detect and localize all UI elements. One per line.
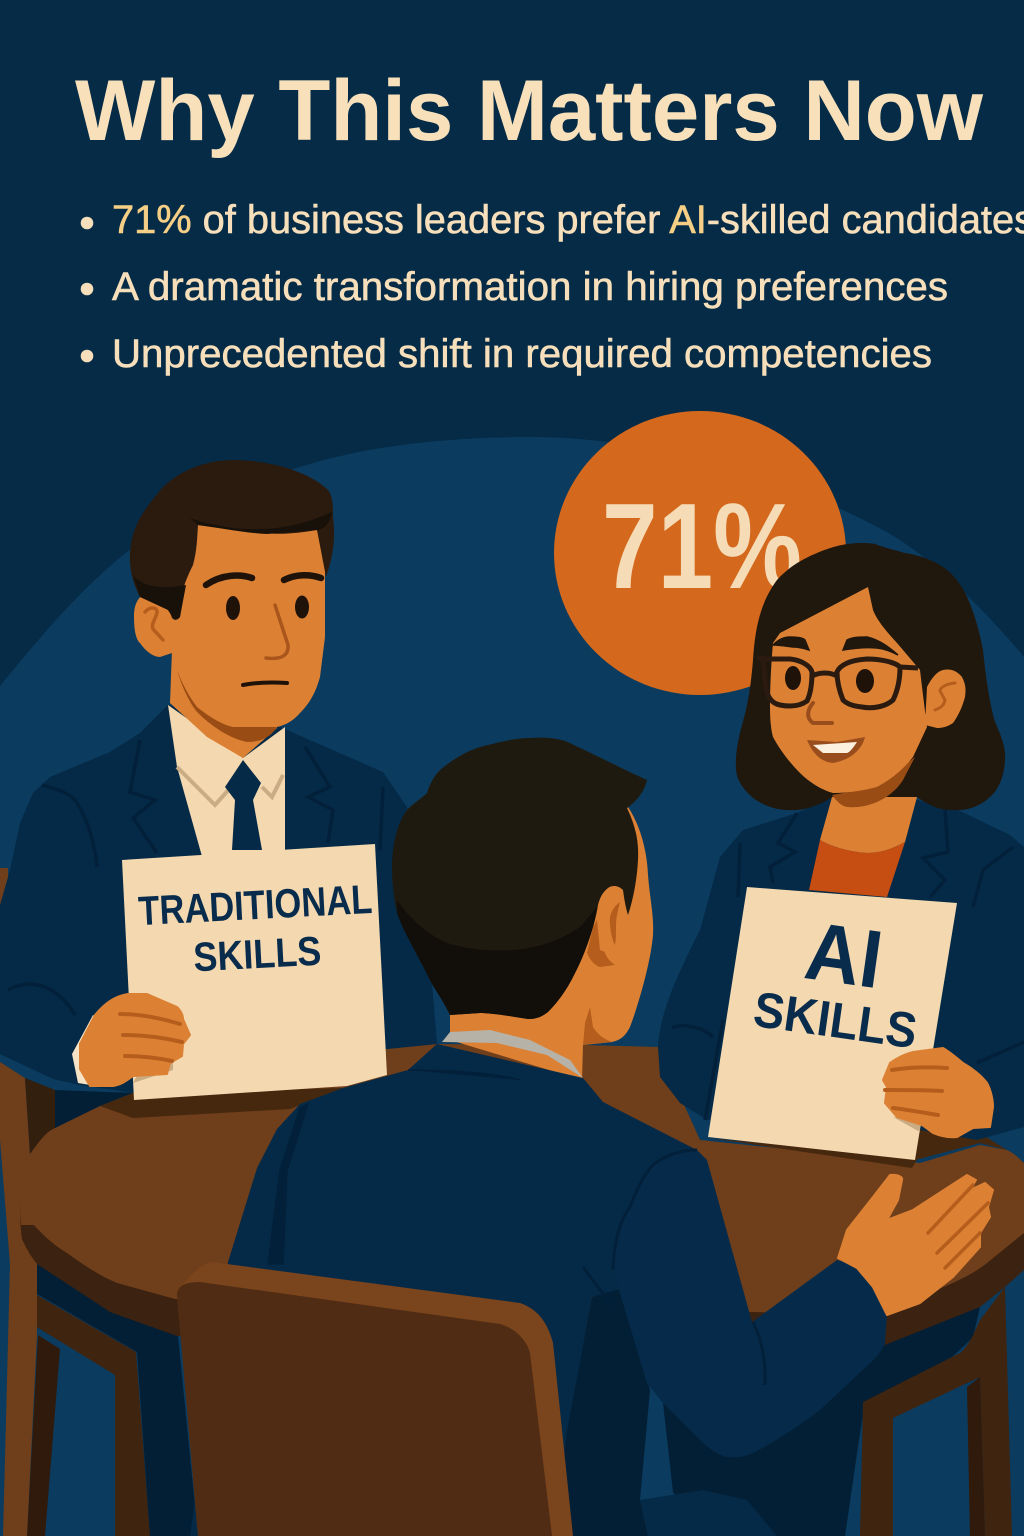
sign traditional skills: SKILLS bbox=[192, 928, 322, 980]
left hair shadow bbox=[133, 512, 332, 620]
sign AI skills: SKILLS bbox=[750, 981, 920, 1059]
bullet 1: 71% of business leaders prefer AI-skilled candidates bbox=[112, 198, 1024, 242]
right hair back bbox=[736, 543, 1005, 810]
right chair bbox=[860, 1287, 1012, 1536]
center arm crease bbox=[583, 1150, 765, 1385]
right face bbox=[770, 587, 927, 793]
center neck shadow bbox=[583, 1007, 613, 1045]
right neck bbox=[820, 797, 917, 853]
bullet 3: Unprecedented shift in required competencies bbox=[112, 332, 932, 376]
left face bbox=[172, 525, 325, 727]
under-table shadow bbox=[37, 1090, 980, 1536]
left face features bbox=[206, 575, 321, 685]
person right bbox=[658, 543, 1024, 1140]
left jacket bbox=[0, 705, 437, 1093]
right top bbox=[809, 840, 905, 897]
center ear shadow bbox=[587, 920, 615, 967]
person center, seen from back bbox=[190, 738, 993, 1536]
left ear bbox=[134, 595, 175, 657]
center lower body shadow bbox=[550, 1285, 650, 1536]
glasses bbox=[757, 658, 918, 708]
center hair bbox=[392, 738, 647, 1019]
hand right bbox=[883, 1048, 993, 1137]
sign AI skills: AI bbox=[800, 905, 888, 1006]
stat circle 71%: 71% bbox=[602, 478, 802, 614]
stat circle 71% bbox=[554, 411, 846, 695]
center hand bbox=[838, 1175, 993, 1315]
center body bbox=[190, 1044, 707, 1536]
bullet 2: A dramatic transformation in hiring preferences bbox=[112, 265, 948, 309]
center body crease bbox=[268, 1070, 520, 1264]
left shirt and tie bbox=[168, 705, 285, 860]
background arch bbox=[0, 437, 1024, 1536]
right eyes and brows bbox=[773, 637, 898, 693]
bullet list bbox=[81, 198, 1024, 376]
sign traditional skills: TRADITIONAL bbox=[137, 876, 373, 934]
right jacket bbox=[658, 797, 1024, 1140]
left chair bbox=[0, 868, 150, 1536]
left hair bbox=[130, 460, 334, 620]
center collar bbox=[442, 1030, 583, 1078]
right ear bbox=[925, 669, 966, 728]
center lower bump bbox=[640, 1490, 777, 1536]
right nose and smile bbox=[807, 703, 865, 763]
table bbox=[20, 1044, 1024, 1345]
title: Why This Matters Now bbox=[75, 63, 984, 159]
person left bbox=[0, 460, 437, 1093]
center neck and ear side bbox=[450, 807, 653, 1080]
center ear bbox=[597, 887, 629, 960]
hand left bbox=[72, 994, 190, 1086]
sign traditional skills bbox=[122, 844, 387, 1100]
sign AI skills bbox=[708, 887, 957, 1160]
front chair bbox=[177, 1262, 573, 1536]
left neck bbox=[170, 650, 277, 758]
center hair shadow bbox=[397, 900, 597, 1019]
center arm bbox=[613, 1150, 887, 1457]
